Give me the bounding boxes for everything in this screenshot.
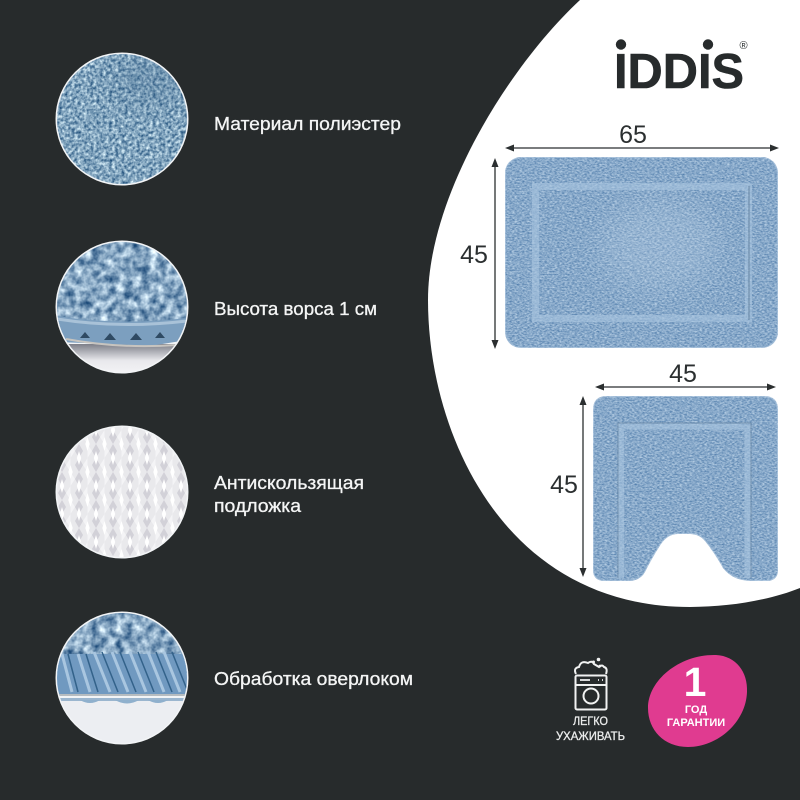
logo: IDDIS: ® <box>740 40 748 52</box>
dimension: 45: 45 <box>550 471 578 499</box>
dimension: 65: 65 <box>619 121 647 149</box>
label: easy care: ЛЕГКО <box>573 714 608 728</box>
arrow: height 45 <box>580 396 586 577</box>
dimension: 45: 45 <box>669 360 697 388</box>
arrow: width 45 <box>595 384 776 390</box>
feature: material <box>56 52 401 186</box>
logo: IDDIS: IDDIS <box>614 45 744 99</box>
label: anti-slip backing: Антискользящая <box>214 473 364 493</box>
photo: mat <box>505 157 778 348</box>
warranty badge <box>648 655 747 747</box>
label: warranty: ГАРАНТИИ <box>667 717 725 729</box>
photo: contour mat <box>593 396 778 581</box>
photo: overlock edge <box>56 612 188 745</box>
arrow: width 65 <box>505 144 779 152</box>
pink blob <box>648 655 747 747</box>
label: warranty: ГОД <box>685 704 707 716</box>
photo: anti-slip backing <box>56 426 188 558</box>
care badge <box>556 658 625 743</box>
label: easy care: УХАЖИВАТЬ <box>556 729 625 743</box>
label: overlock edge: Обработка оверлоком <box>214 669 413 689</box>
number: 1: 1 <box>684 659 706 705</box>
rectangular mat 65x45 <box>460 121 779 349</box>
arrow: height 45 <box>492 158 498 349</box>
photo: pile height <box>56 240 188 374</box>
label: anti-slip backing: подложка <box>214 496 302 516</box>
label: material: Материал полиэстер <box>214 114 401 134</box>
label: pile height: Высота ворса 1 см <box>214 299 377 319</box>
feature: overlock edge <box>56 612 413 745</box>
white background shape <box>428 0 800 607</box>
contour mat 45x45 <box>550 360 778 581</box>
dimension: 45: 45 <box>460 241 488 269</box>
icon: washing machine <box>575 658 607 710</box>
photo: polyester pile <box>56 52 190 186</box>
feature: pile height <box>56 240 377 374</box>
feature: anti-slip backing <box>56 426 364 558</box>
